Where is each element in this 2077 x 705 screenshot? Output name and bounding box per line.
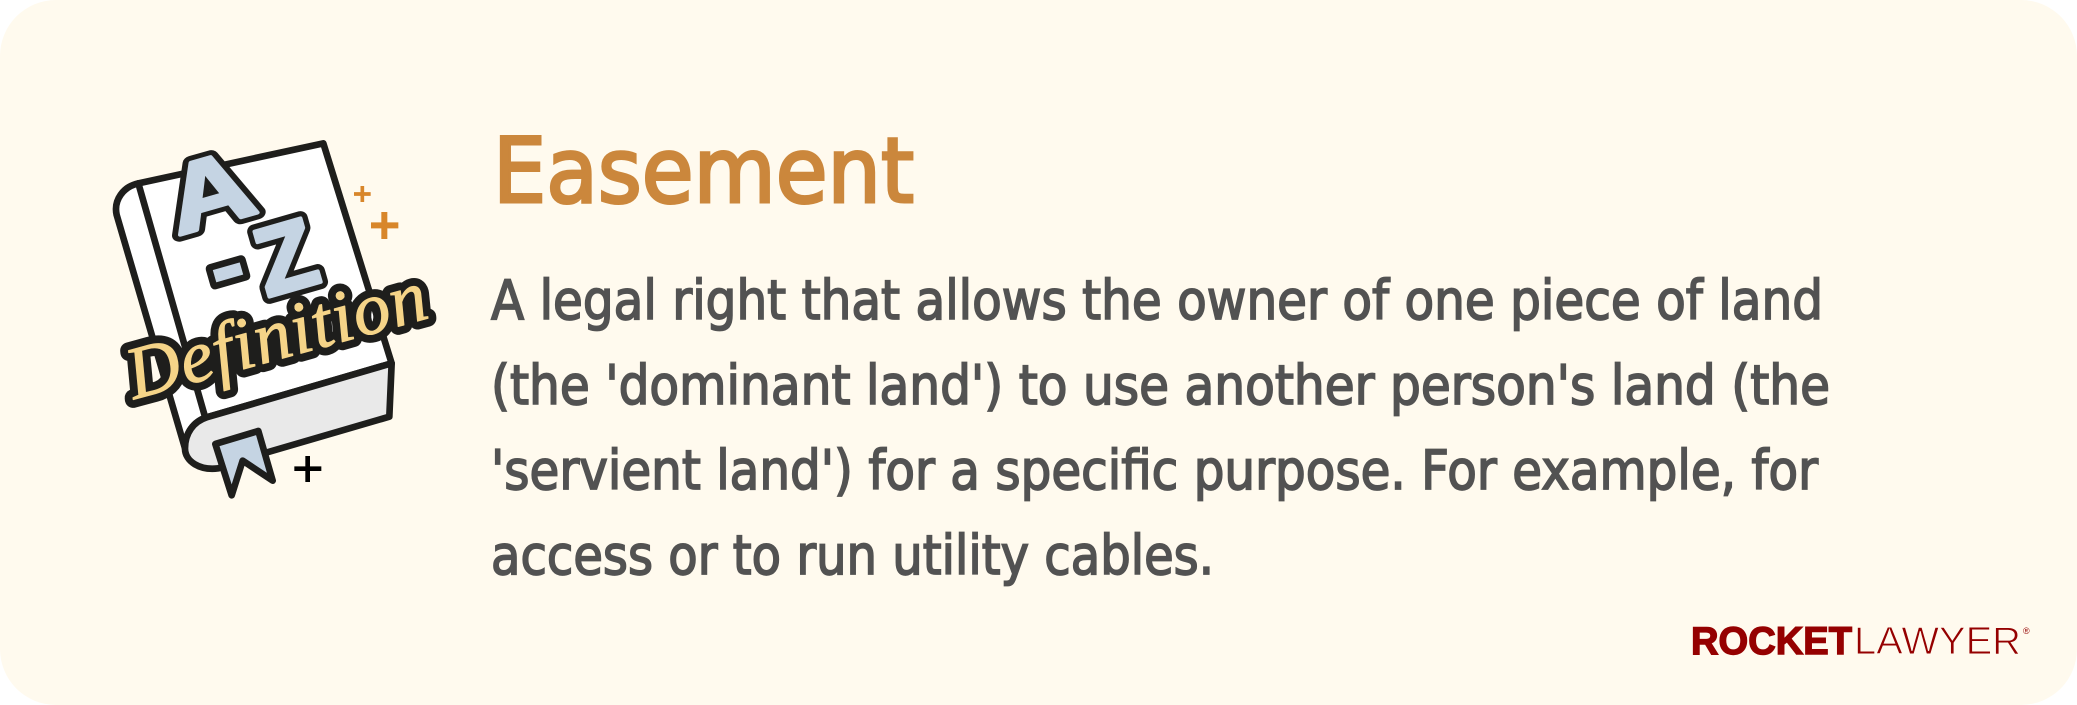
sparkle: black plus <box>294 456 321 482</box>
book pages <box>185 363 392 469</box>
book spine line <box>138 183 205 417</box>
line 2: (the 'dominant land') to use another person's land (the <box>491 354 1830 417</box>
letter Z: Z <box>243 197 329 318</box>
logo word: LAWYER: LAWYER <box>1854 620 2021 663</box>
book cover <box>116 143 392 448</box>
line 4: access or to run utility cables. <box>491 524 1214 587</box>
sparkle: small orange plus <box>354 186 371 202</box>
logo: Rocket Lawyer <box>1691 620 2030 663</box>
line 3: 'servient land') for a specific purpose. For example, for <box>491 439 1819 502</box>
dash <box>209 258 247 286</box>
script word: Definition: Definition <box>116 255 436 416</box>
logo registered mark: ® <box>2023 626 2030 636</box>
letter A: A <box>154 129 266 256</box>
bookmark <box>215 431 273 495</box>
logo word: ROCKET: ROCKET <box>1691 620 1852 663</box>
definition text block <box>491 269 1830 587</box>
line 1: A legal right that allows the owner of one piece of land <box>491 269 1823 332</box>
title: Easement <box>493 119 914 224</box>
sparkle: large orange plus <box>371 212 398 239</box>
icon: A-Z definition book <box>116 129 436 495</box>
letter A: A <box>154 129 266 256</box>
letter Z: Z <box>243 197 329 318</box>
script word: Definition: Definition <box>116 255 436 416</box>
